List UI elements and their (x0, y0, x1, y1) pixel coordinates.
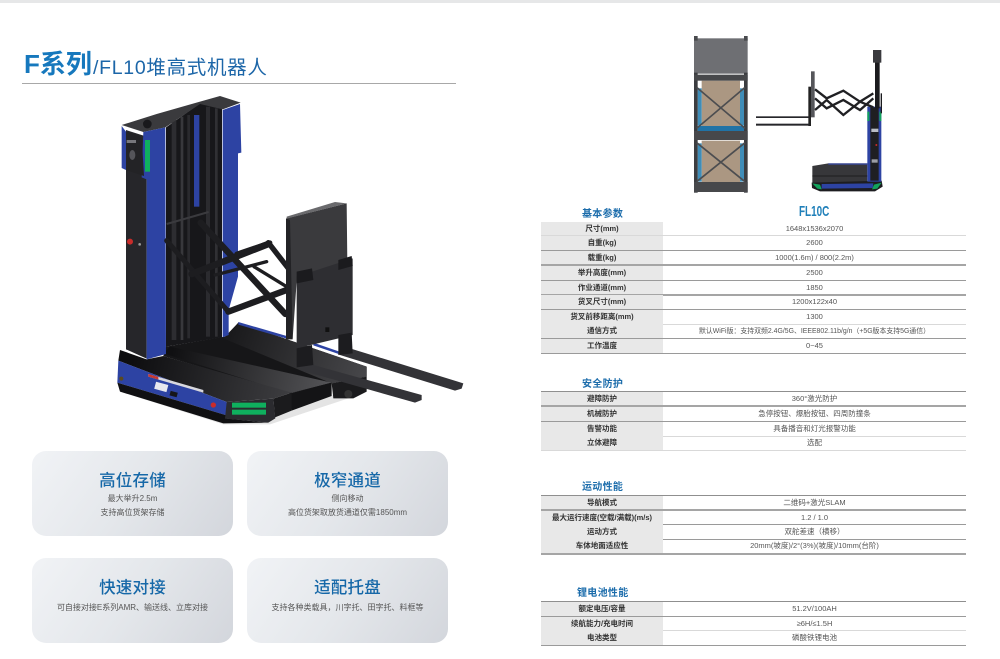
table: battery: 51.2V/100AH (792, 604, 837, 613)
table: basic parameters: 举升高度(mm) (578, 268, 626, 277)
table: basic parameters (541, 222, 966, 354)
card heading: 适配托盘 (314, 579, 381, 597)
table: motion: 双舵差速（横移） (784, 526, 844, 536)
title: series name: F系列 (24, 49, 92, 79)
table: basic parameters: 0~45 (806, 341, 823, 350)
feature card: high storage (32, 451, 233, 536)
table: basic parameters: 货叉前移距离(mm) (570, 312, 634, 321)
backrest plate (286, 202, 347, 339)
table: basic parameters: 1850 (806, 282, 823, 292)
base shadow (120, 383, 367, 424)
middle platform (163, 347, 332, 411)
card text: 支持高位货架存储 (100, 508, 164, 517)
table: safety: 急停按钮、爆胎按钮、四周防撞条 (758, 409, 871, 418)
table: safety: 避障防护 (587, 394, 617, 402)
table: safety: 选配 (807, 438, 822, 447)
table: safety: 360°激光防护 (792, 394, 837, 402)
column e-stop (127, 239, 133, 245)
heading: motion: 运动性能 (582, 482, 623, 493)
table: motion: 车体地面适应性 (576, 541, 628, 550)
chassis (117, 350, 292, 423)
table: safety (541, 391, 966, 452)
column black side (126, 130, 147, 359)
fork far (340, 348, 463, 391)
table: safety: 具备播音和灯光报警功能 (773, 424, 856, 433)
table: motion: 运动方式 (587, 526, 617, 536)
card heading: 极窄通道 (314, 472, 381, 490)
table: motion: 二维码+激光SLAM (783, 498, 846, 506)
rack with pallets (694, 36, 748, 193)
scissor lift (167, 223, 288, 314)
fork near (300, 365, 422, 403)
model name: FL10C (799, 203, 829, 220)
right platform (223, 322, 367, 398)
right mast blue (223, 104, 241, 337)
feature card: narrow aisle (247, 451, 448, 536)
table: basic parameters: 1300 (806, 312, 823, 321)
table: battery: 电池类型 (587, 632, 617, 642)
card text: 高位货架取放货通道仅需1850mm (288, 508, 407, 517)
table: basic parameters: 1000(1.6m) / 800(2.2m) (775, 252, 854, 262)
small robot forks (811, 71, 815, 117)
heading: safety: 安全防护 (582, 379, 623, 390)
table: basic parameters: 默认WiFi版：支持双频2.4G/5G、IEEE802.11b/g/n（+5G版本支持5G通信） (699, 328, 930, 335)
table: battery (541, 601, 966, 647)
green bumper lights (232, 403, 266, 408)
head face (122, 120, 152, 176)
table: battery: 额定电压/容量 (578, 604, 626, 613)
table: basic parameters: 2600 (806, 238, 823, 247)
table: motion: 1.2 / 1.0 (801, 512, 828, 522)
table: motion (541, 495, 966, 556)
feature card: fast docking (32, 558, 233, 643)
table: battery: 磷酸铁锂电池 (792, 632, 837, 642)
chassis label strip (148, 374, 203, 393)
table: motion: 20mm(坡度)/2°(3%)(坡度)/10mm(台阶) (750, 541, 879, 550)
floor deck behind platforms (163, 323, 367, 393)
fork carriage (297, 256, 353, 367)
table: basic parameters: 自重(kg) (588, 238, 616, 247)
mast interior (166, 103, 222, 347)
table: basic parameters: 2500 (806, 268, 823, 277)
feature card: pallet fit (247, 558, 448, 643)
table: battery: 续航能力/充电时间 (571, 618, 633, 628)
table: basic parameters: 1200x122x40 (792, 297, 837, 306)
table: safety: 告警功能 (587, 424, 617, 433)
table: basic parameters: 1648x1536x2070 (786, 224, 843, 232)
title rule (22, 83, 456, 84)
table: basic parameters: 尺寸(mm) (585, 224, 619, 232)
table: basic parameters: 工作温度 (587, 341, 617, 350)
title (24, 49, 268, 79)
table: safety: 立体避障 (587, 438, 617, 447)
table: motion: 最大运行速度(空载/满载)(m/s) (552, 512, 652, 522)
table: basic parameters: 通信方式 (587, 326, 617, 335)
card text: 可自接对接E系列AMR、输送线、立库对接 (57, 603, 208, 612)
card text: 最大举升2.5m (108, 494, 157, 503)
table: basic parameters: 货叉尺寸(mm) (578, 297, 626, 306)
card heading: 快速对接 (99, 579, 166, 597)
top grey strip (0, 0, 1000, 3)
heading: battery: 锂电池性能 (577, 588, 628, 599)
table: basic parameters: 作业通道(mm) (578, 282, 626, 292)
table: motion: 导航模式 (587, 498, 617, 506)
emergency stop (211, 402, 216, 408)
head top (122, 96, 241, 132)
side view illustration (694, 36, 883, 193)
column blue front (142, 127, 166, 359)
card text: 侧向移动 (332, 494, 364, 503)
table: basic parameters: 载重(kg) (588, 252, 616, 262)
main robot illustration (117, 96, 464, 424)
heading: basic parameters: 基本参数 (582, 209, 623, 220)
table: battery: ≥6H/≤1.5H (797, 618, 832, 628)
table: safety: 机械防护 (587, 409, 617, 418)
green light bar (145, 140, 150, 172)
card heading: 高位存储 (99, 472, 166, 490)
card text: 支持各种类载具，川字托、田字托、料框等 (272, 603, 424, 612)
small robot side view (756, 50, 883, 191)
title: product name: /FL10堆高式机器人 (93, 57, 268, 79)
